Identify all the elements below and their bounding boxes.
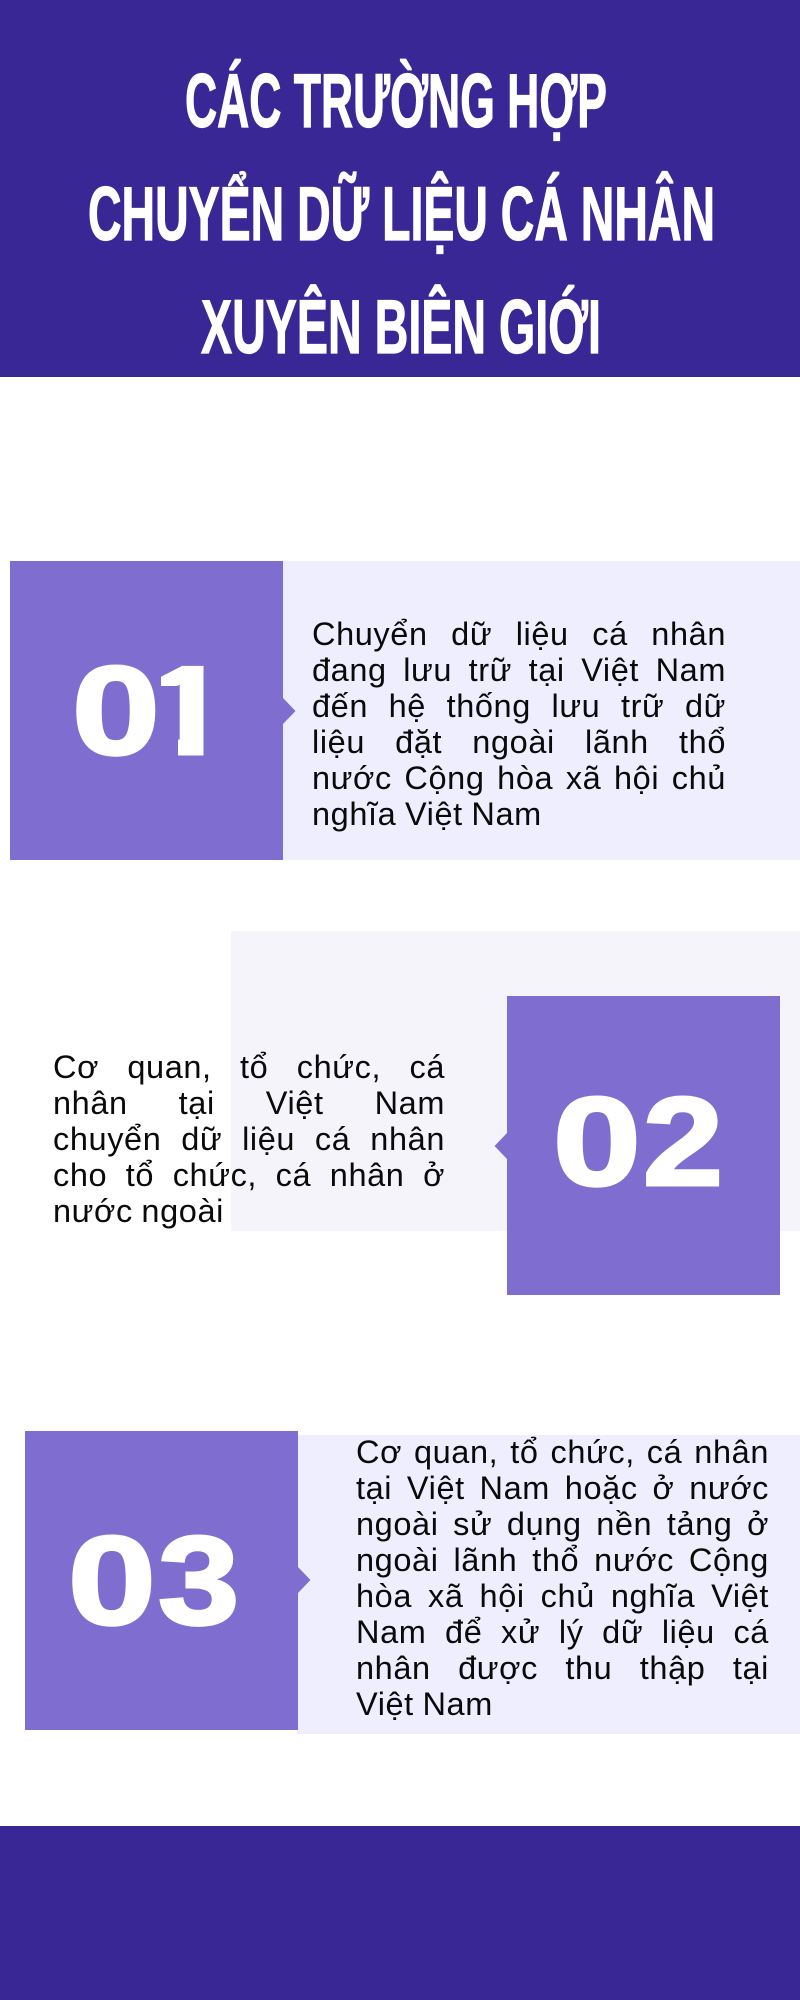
- text 01: nghĩa Việt Nam: [312, 796, 542, 832]
- text 01: nước Cộng hòa xã hội chủ: [312, 760, 726, 796]
- text 02: nhân tại Việt Nam: [53, 1085, 445, 1121]
- text 03: tại Việt Nam hoặc ở nước: [356, 1470, 769, 1506]
- number block 03: [25, 1431, 298, 1730]
- text 01: đang lưu trữ tại Việt Nam: [312, 652, 726, 688]
- text 01: đến hệ thống lưu trữ dữ: [312, 688, 726, 724]
- number block 01: [10, 561, 283, 860]
- text 02: nước ngoài: [53, 1193, 224, 1229]
- number 02: [553, 1071, 723, 1212]
- text 03: ngoài lãnh thổ nước Cộng: [356, 1542, 769, 1578]
- text 03: Nam để xử lý dữ liệu cá: [356, 1614, 769, 1650]
- panel: case 02: [53, 931, 800, 1295]
- text 02: Cơ quan, tổ chức, cá: [53, 1049, 445, 1085]
- number 03: 0: [68, 1510, 156, 1651]
- number 01: 1: [145, 640, 232, 781]
- text 02: chuyển dữ liệu cá nhân: [53, 1121, 445, 1157]
- arrow 01: [283, 698, 296, 724]
- text 02: [53, 1049, 445, 1229]
- number 01: [72, 640, 204, 781]
- text 02: cho tổ chức, cá nhân ở: [53, 1157, 445, 1193]
- panel 01 background: [282, 561, 800, 860]
- number 02: 2: [643, 1071, 723, 1212]
- number 03: 3: [158, 1510, 239, 1651]
- number block 02: [507, 996, 780, 1295]
- arrow 02: [494, 1133, 507, 1159]
- text 03: hòa xã hội chủ nghĩa Việt: [356, 1578, 769, 1614]
- header banner: [0, 0, 800, 377]
- footer banner: [0, 1826, 800, 2000]
- panel 03 background: [297, 1435, 800, 1734]
- panel 02 background: [231, 931, 800, 1231]
- text 01: liệu đặt ngoài lãnh thổ: [312, 724, 726, 760]
- number 01: 0: [72, 640, 160, 781]
- arrow 03: [298, 1567, 310, 1593]
- text 03: Cơ quan, tổ chức, cá nhân: [356, 1434, 769, 1470]
- text 03: [356, 1434, 769, 1722]
- number 02: 0: [553, 1071, 641, 1212]
- text 01: [312, 616, 726, 832]
- number 03: [68, 1510, 239, 1651]
- panel: case 01: [10, 561, 800, 860]
- title: [88, 58, 715, 370]
- text 03: ngoài sử dụng nền tảng ở: [356, 1506, 769, 1542]
- text 01: Chuyển dữ liệu cá nhân: [312, 616, 726, 652]
- text 03: Việt Nam: [356, 1686, 493, 1722]
- text 03: nhân được thu thập tại: [356, 1650, 769, 1686]
- panel: case 03: [25, 1431, 800, 1734]
